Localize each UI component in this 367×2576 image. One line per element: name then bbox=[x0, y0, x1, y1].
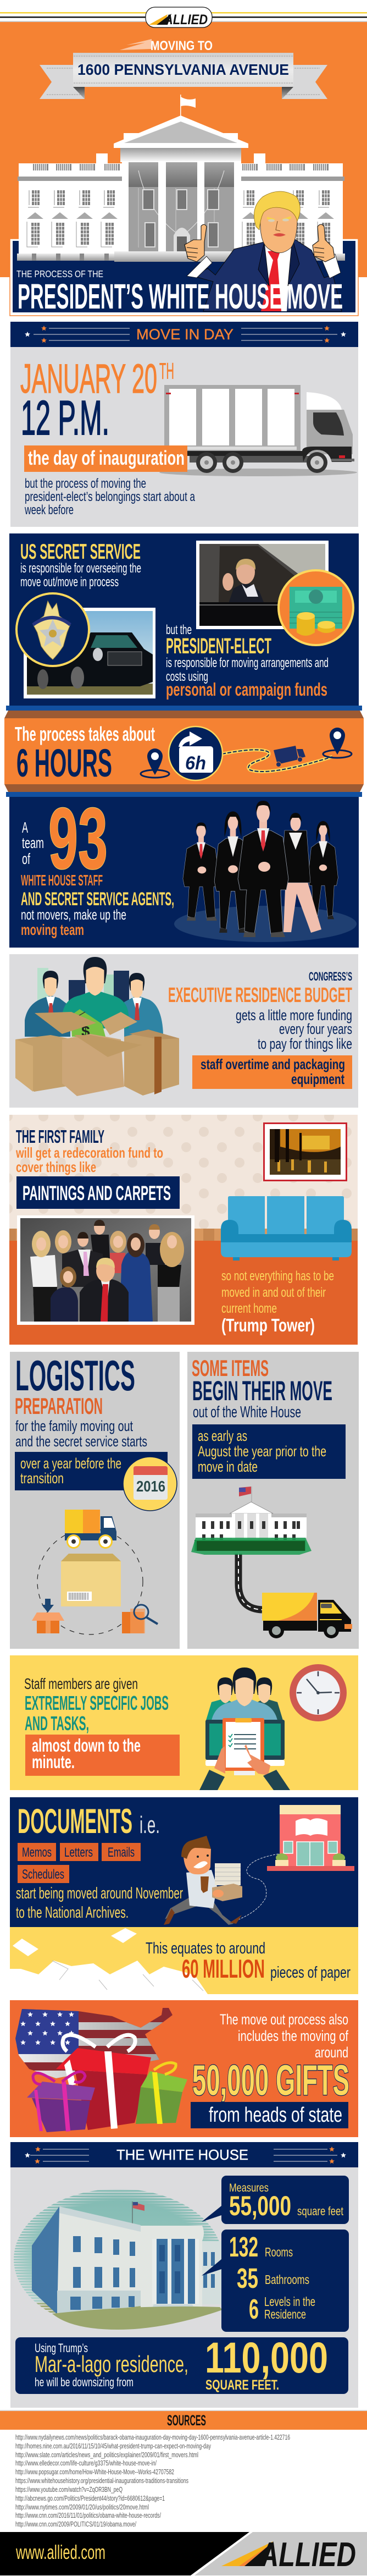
callout: mar-a-lago comparison: 110,000 bbox=[205, 2333, 328, 2382]
section header: move in day bbox=[10, 322, 358, 347]
panel: moving team bbox=[9, 790, 359, 948]
sources list: http://www.slate.com/articles/news_and_politics/explainer/2009/01/first_movers.html bbox=[15, 2451, 198, 2459]
trump cartoon bbox=[185, 191, 342, 311]
dashed route bbox=[232, 1854, 279, 1922]
logistics text: for the family moving out bbox=[15, 1418, 133, 1434]
section header: the white house: THE WHITE HOUSE bbox=[116, 2146, 248, 2163]
secret service text bbox=[20, 561, 141, 590]
budget callout bbox=[192, 1055, 352, 1089]
redecoration text: will get a redecoration fund to bbox=[15, 1144, 163, 1161]
sources list: http://abcnews.go.com/Politics/President44/story?id=6680612&page=1 bbox=[15, 2494, 165, 2502]
logistics heading: LOGISTICS bbox=[15, 1351, 135, 1400]
illustration: purple gift bbox=[27, 2072, 95, 2132]
moving to tagline bbox=[120, 38, 213, 53]
illustration: white house engraving bbox=[11, 2186, 228, 2335]
framed painting bbox=[263, 1122, 347, 1181]
white house illustration bbox=[17, 95, 345, 262]
callout: rooms bathrooms levels: Rooms bbox=[265, 2245, 293, 2259]
illustration: white house with lawn bbox=[191, 1487, 312, 1555]
sources list: http://www.nytimes.com/2009/01/20/us/politics/20move.html bbox=[15, 2503, 149, 2511]
body text: but the process of moving the bbox=[25, 476, 146, 491]
sources list: http://homes.nine.com.au/2016/11/15/10/45/what-president-trump-can-expect-on-moving-day bbox=[15, 2442, 211, 2450]
illustration: security staff bbox=[174, 801, 357, 942]
allied logo pill: ALLIED bbox=[164, 12, 208, 27]
panel: items begin move bbox=[187, 1352, 359, 1649]
sixty million figure: 60 MILLION bbox=[182, 1954, 265, 1983]
callout: mar-a-lago comparison: he will be downsizing from bbox=[35, 2375, 134, 2389]
callout: timing bbox=[15, 1452, 168, 1490]
trump tower text: (Trump Tower) bbox=[221, 1315, 315, 1335]
documents heading: DOCUMENTS bbox=[18, 1802, 132, 1841]
photo: trump in car bbox=[196, 541, 329, 629]
sources heading: SOURCES bbox=[167, 2412, 206, 2429]
moving truck bbox=[159, 385, 357, 476]
icon: 2016 calendar bbox=[123, 1457, 177, 1511]
budget text bbox=[168, 970, 352, 1052]
illustration: staff with checklist bbox=[199, 1667, 290, 1790]
road bbox=[238, 1554, 262, 1610]
body text bbox=[24, 476, 195, 518]
callout: mar-a-lago comparison: SQUARE FEET. bbox=[205, 2377, 279, 2393]
illustration: man carrying documents bbox=[164, 1836, 242, 1925]
icon: clock bbox=[293, 1667, 343, 1718]
panel: staff jobs bbox=[10, 1655, 358, 1790]
illustration: national archives building bbox=[267, 1805, 354, 1871]
panel: documents bbox=[10, 1797, 358, 1927]
callout: to the minute bbox=[25, 1735, 180, 1776]
callout: to the minute: almost down to the bbox=[32, 1735, 141, 1755]
callout: as early as bbox=[192, 1424, 346, 1479]
icon: 2016 calendar: 2016 bbox=[136, 1478, 165, 1495]
sources list: http://www.cnn.com/2009/POLITICS/01/19/obama.move/ bbox=[15, 2520, 136, 2528]
trump tower text: current home bbox=[221, 1301, 277, 1316]
callout: paintings and carpets: PAINTINGS AND CARPETS bbox=[23, 1182, 171, 1204]
callout: rooms bathrooms levels: Levels in the bbox=[264, 2294, 315, 2309]
icon: six hour clock badge bbox=[169, 726, 223, 780]
budget callout: equipment bbox=[291, 1071, 344, 1087]
redecoration text: cover things like bbox=[16, 1159, 96, 1175]
ribbon banner: 1600 PENNSYLVANIA AVENUE bbox=[77, 61, 289, 78]
panel: move in day bbox=[10, 347, 358, 527]
orange callout: the day of inauguration bbox=[28, 447, 185, 469]
illustration: paper pile bbox=[10, 1928, 208, 1994]
illustration: red gift bbox=[56, 2035, 151, 2130]
route path bbox=[222, 750, 332, 772]
icon: six hour clock badge: 6h bbox=[185, 753, 206, 774]
callout: timing: over a year before the bbox=[20, 1455, 121, 1472]
callout: timing: transition bbox=[20, 1470, 64, 1487]
icon: destination pin bbox=[323, 728, 352, 758]
i.e.: i.e. bbox=[140, 1812, 160, 1839]
panel: secret service and president-elect bbox=[9, 533, 359, 706]
president-elect text: costs using bbox=[166, 669, 208, 684]
team text bbox=[22, 819, 44, 867]
callout: as early as: move in date bbox=[198, 1458, 258, 1475]
callout: as early as: as early as bbox=[198, 1428, 247, 1444]
footer bbox=[0, 2532, 367, 2575]
callout: rooms bathrooms levels: 132 bbox=[229, 2231, 258, 2263]
logistics text: and the secret service starts bbox=[15, 1433, 147, 1450]
callout: rooms bathrooms levels: Residence bbox=[264, 2307, 306, 2321]
callout: square footage: Measures bbox=[229, 2182, 269, 2194]
chips: document types bbox=[18, 1843, 141, 1883]
duration number: 6 HOURS bbox=[16, 742, 112, 785]
preparation heading: PREPARATION bbox=[15, 1393, 103, 1419]
illustration: yellow moving truck bbox=[262, 1593, 352, 1638]
callout: rooms bathrooms levels: 35 bbox=[237, 2263, 258, 2294]
hero subtitle: THE PROCESS OF THE bbox=[16, 268, 103, 279]
president-elect text: PRESIDENT-ELECT bbox=[166, 634, 271, 658]
gifts text bbox=[220, 2011, 348, 2061]
panel: white house facts bbox=[10, 2167, 358, 2408]
illustration: logistics cycle bbox=[32, 1510, 158, 1634]
some items heading: SOME ITEMS bbox=[192, 1355, 269, 1381]
panel: logistics preparation bbox=[10, 1351, 180, 1649]
panel: executive residence budget bbox=[9, 954, 358, 1108]
sources list: http://www.popsugar.com/home/How-White-House-Move--Works-42707582 bbox=[15, 2468, 174, 2476]
chips: document types: Emails bbox=[108, 1845, 135, 1860]
team labels bbox=[21, 872, 174, 938]
callout: mar-a-lago comparison bbox=[15, 2333, 348, 2394]
heading: secret service: US SECRET SERVICE bbox=[20, 540, 141, 564]
out of white house text: out of the White House bbox=[193, 1403, 301, 1421]
sources list bbox=[15, 2433, 290, 2528]
panel: first family bbox=[9, 1115, 358, 1345]
title frame bbox=[10, 239, 358, 316]
gifts text: around bbox=[315, 2044, 348, 2061]
icon: secret service badge bbox=[16, 593, 89, 666]
illustration: flag map bbox=[15, 2008, 175, 2079]
redecoration text bbox=[15, 1144, 163, 1175]
documents text: to the National Archives. bbox=[16, 1904, 129, 1922]
callout: rooms bathrooms levels: Bathrooms bbox=[265, 2272, 309, 2287]
trump tower text bbox=[221, 1269, 334, 1335]
specific jobs heading: EXTREMELY SPECIFIC JOBS bbox=[25, 1692, 169, 1714]
secret service text: is responsible for overseeing the bbox=[20, 561, 141, 576]
chips: document types: Letters bbox=[64, 1845, 93, 1860]
ribbon banner bbox=[40, 53, 327, 99]
duration text: The process takes about bbox=[15, 723, 155, 745]
icon: truck on route bbox=[274, 746, 305, 767]
callout: square footage: 55,000 bbox=[229, 2190, 291, 2221]
sources list: https://www.whitehousehistory.org/presidential-inaugurations-traditions-transitions bbox=[15, 2476, 188, 2485]
header rule lines bbox=[0, 12, 367, 22]
documents text: start being moved around November bbox=[16, 1885, 183, 1902]
team text: A bbox=[22, 819, 28, 836]
logistics text bbox=[15, 1418, 147, 1450]
callout: mar-a-lago comparison: Mar-a-lago residence, bbox=[35, 2351, 188, 2377]
panel: gifts bbox=[10, 2000, 358, 2137]
callout: square footage: square feet bbox=[297, 2204, 343, 2218]
illustration: blue sofa bbox=[221, 1196, 352, 1261]
team labels: not movers, make up the bbox=[21, 906, 126, 923]
time heading: 12 P.M. bbox=[21, 390, 109, 445]
callout: paintings and carpets bbox=[16, 1176, 180, 1209]
team labels: AND SECRET SERVICE AGENTS, bbox=[21, 889, 174, 910]
trump tower text: moved in and out of their bbox=[221, 1285, 326, 1300]
section header: the white house bbox=[10, 2142, 358, 2167]
team text: of bbox=[22, 850, 30, 867]
body text: president-elect’s belongings start about a bbox=[25, 489, 195, 504]
allied logo bbox=[221, 2536, 356, 2574]
illustration: cardboard boxes bbox=[15, 1012, 179, 1096]
chips: document types: Memos bbox=[22, 1845, 52, 1860]
team text: team bbox=[22, 834, 44, 851]
illustration: city skyline bbox=[37, 968, 129, 1009]
callout: mar-a-lago comparison: Using Trump’s bbox=[35, 2341, 88, 2355]
team labels: WHITE HOUSE STAFF bbox=[21, 872, 103, 889]
photo: trump family bbox=[17, 1215, 194, 1325]
orange hero background bbox=[0, 22, 367, 277]
callout: to the minute: minute. bbox=[32, 1752, 75, 1772]
documents text bbox=[16, 1885, 183, 1922]
specific jobs heading: AND TASKS, bbox=[25, 1712, 89, 1735]
family heading: THE FIRST FAMILY bbox=[16, 1126, 104, 1147]
icon: start pin bbox=[141, 748, 169, 778]
orange callout bbox=[24, 445, 187, 472]
moving to tagline: MOVING TO bbox=[151, 38, 213, 53]
sources list: https://www.youtube.com/watch?v=ZqOR3BN_peQ bbox=[15, 2485, 123, 2494]
team labels: moving team bbox=[21, 921, 84, 938]
specific jobs heading bbox=[25, 1692, 169, 1735]
president-elect text bbox=[166, 623, 329, 700]
icon: cash and coins bbox=[279, 570, 353, 645]
panel: 60 million bbox=[10, 1927, 358, 1994]
illustration: green gift bbox=[136, 2063, 187, 2124]
sources heading bbox=[0, 2410, 367, 2430]
equates text: This equates to around bbox=[146, 1940, 265, 1957]
secret service text: move out/move in process bbox=[20, 575, 119, 590]
staff text: Staff members are given bbox=[24, 1675, 138, 1692]
illustration: money bag in boxes bbox=[71, 1009, 105, 1040]
callout: square footage bbox=[202, 2176, 349, 2224]
panel: move in day: TH bbox=[159, 358, 174, 384]
date heading: JANUARY 20 bbox=[20, 356, 157, 401]
band: six hours bbox=[4, 706, 364, 797]
sources list: http://www.elledecor.com/life-culture/g3375/white-house-move-in/ bbox=[15, 2459, 157, 2467]
president-elect text: but the bbox=[166, 623, 192, 637]
illustration: three businessmen bbox=[25, 957, 163, 1037]
photo: presidential limo bbox=[24, 608, 155, 698]
sources list: http://www.cnn.com/2016/11/01/politics/obama-white-house-records/ bbox=[15, 2511, 161, 2519]
team number: 93 bbox=[48, 790, 108, 887]
illustration: money bag in boxes: $ bbox=[81, 1023, 90, 1040]
body text: week before bbox=[24, 503, 74, 518]
allied logo pill bbox=[146, 7, 212, 27]
website: www.allied.com bbox=[15, 2541, 105, 2563]
callout: rooms bathrooms levels: 6 bbox=[249, 2293, 259, 2325]
section header: move in day: MOVE IN DAY bbox=[136, 326, 233, 343]
callout: rooms bathrooms levels bbox=[202, 2230, 349, 2332]
chips: document types: Schedules bbox=[22, 1867, 64, 1882]
